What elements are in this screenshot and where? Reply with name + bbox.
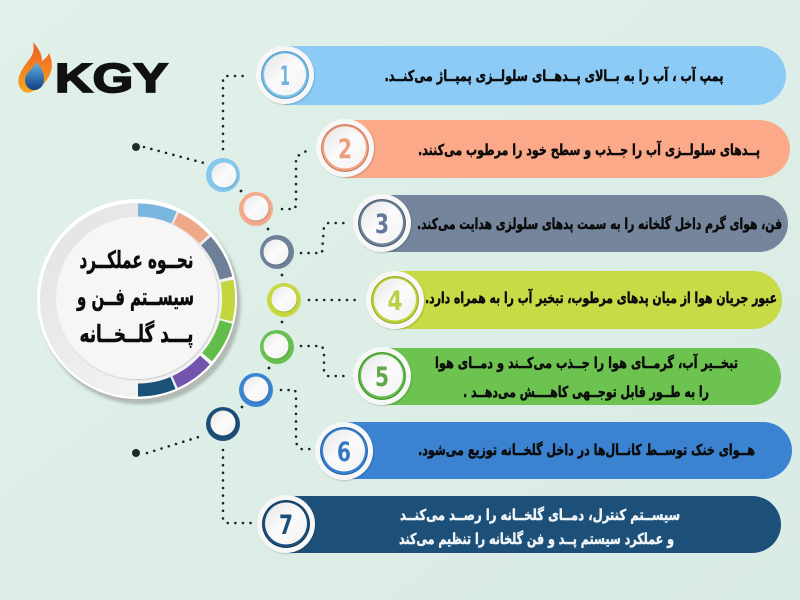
small ring 7 (206, 407, 240, 441)
title: پـــد گلــخــانه (80, 320, 194, 348)
text 7: سیســتم کنترل، دمــای گلخــانه را رصــد می‌کنــد (400, 506, 680, 524)
badge 7 (257, 495, 315, 553)
title: نحــوه عملکــرد (80, 246, 194, 274)
small ring 3 (260, 235, 294, 269)
step 5 (353, 347, 781, 405)
pill 3 (383, 195, 788, 252)
small ring 5 (260, 330, 294, 364)
text 5 (435, 354, 738, 401)
badge 1 (256, 46, 314, 104)
badge 3: 3 (375, 209, 389, 240)
icon: dot upper-left (132, 143, 140, 151)
text 7 (399, 506, 680, 549)
ring segments (138, 210, 229, 390)
small ring 1 (206, 158, 240, 192)
dotted connector lines (144, 76, 357, 523)
icon: flame and water drop (18, 42, 52, 93)
pill 4 (396, 271, 782, 329)
small ring 4 (267, 283, 301, 317)
badge 1: 1 (280, 61, 290, 92)
icon: dot lower-left (132, 449, 140, 457)
title: سیســتم فــن و (76, 283, 194, 311)
badge 2: 2 (338, 134, 352, 165)
small ring 6 (239, 373, 273, 407)
step 6 (315, 422, 792, 480)
pill 6 (344, 422, 792, 479)
pill 5 (382, 348, 781, 405)
center disc (37, 199, 239, 402)
title (76, 246, 194, 348)
badge 5 (353, 347, 411, 405)
text 7: و عملکرد سیستم پــد و فن گلخانه را تنظیم می‌کند (399, 530, 674, 549)
step 1 (256, 46, 786, 105)
step 2 (316, 119, 790, 178)
badge 6 (315, 422, 373, 480)
pill 2 (345, 120, 790, 178)
badge 3 (353, 194, 411, 252)
badge 2 (316, 119, 374, 177)
badge 4: 4 (388, 286, 402, 317)
text 5: را به طــور قابل توجــهی کاهــــش می‌دهــد . (463, 383, 709, 401)
badge 4 (366, 271, 424, 329)
pill 7 (286, 496, 781, 553)
logo wordmark: KGY (55, 55, 168, 101)
step 3 (353, 194, 788, 252)
badge 5: 5 (375, 362, 389, 393)
logo: KGY (18, 42, 168, 101)
small ring 2 (239, 192, 273, 226)
badge 7: 7 (279, 510, 293, 541)
step 7 (257, 495, 781, 553)
badge 6: 6 (337, 437, 351, 468)
step 4 (366, 271, 782, 329)
pill 1 (285, 46, 786, 105)
